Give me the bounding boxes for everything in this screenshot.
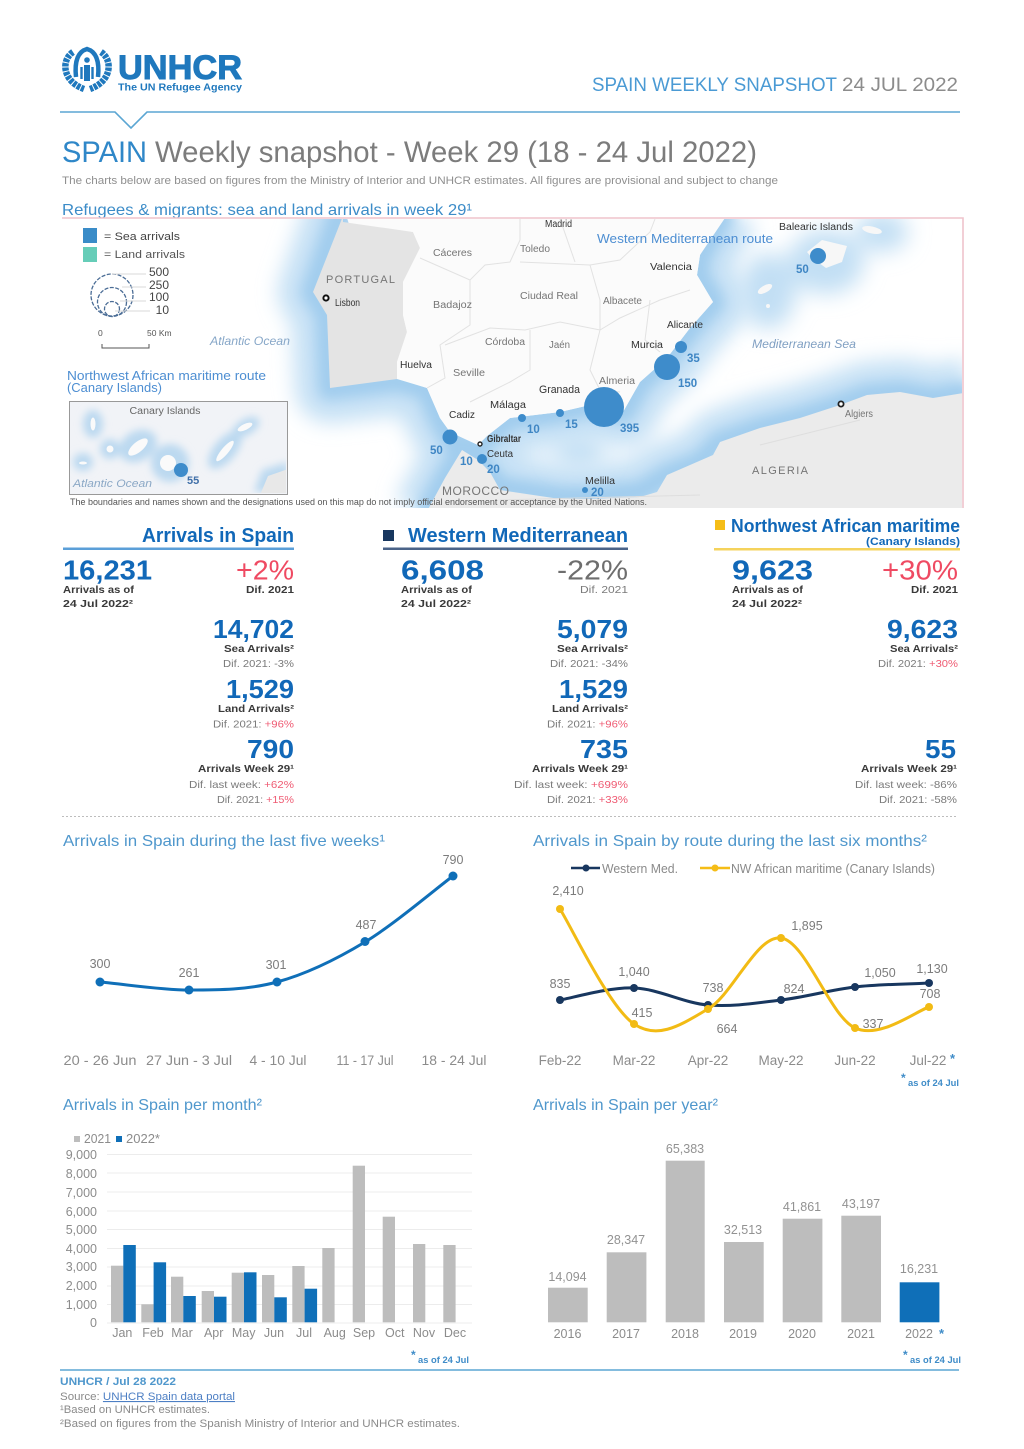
map labels: places: Cadiz [449,410,475,421]
panel: Western Mediterranean [383,525,629,806]
chart: arrivals per year: 43,197 [842,1197,880,1211]
map labels: routes and seas: Western Mediterranean route [597,231,773,246]
title: Weekly snapshot - Week 29 (18 - 24 Jul 2022) [155,136,757,169]
map labels: places: MOROCCO [442,484,509,498]
icon: UNHCR emblem [65,49,109,89]
map labels: routes and seas: Mediterranean Sea [752,337,856,351]
chart: arrivals per year: 2020 [788,1327,816,1341]
panel: Western Mediterranean: 24 Jul 2022² [401,598,472,610]
panel: Arrivals in Spain: Arrivals as of [63,584,135,596]
map labels: places: Gibraltar [487,434,521,445]
chart: arrivals per month: 1,000 [66,1298,97,1312]
map labels: places: PORTUGAL [326,274,395,286]
panel: Northwest African maritime: Arrivals as of [732,584,804,596]
chart: arrivals by route last six months: 835 [550,977,570,991]
heading: Arrivals in Spain per year² [533,1097,719,1114]
chart: arrivals per month: * [411,1348,416,1362]
chart: arrivals by route last six months: 738 [703,981,723,995]
chart: arrivals by route last six months: 1,040 [618,965,650,979]
legend: map [83,228,186,348]
panel: Northwest African maritime: Dif. 2021 [911,584,958,596]
legend: map: 10 [156,303,169,317]
footer: sources and notes: Source: UNHCR Spain data portal [60,1391,235,1403]
chart: arrivals per month: 8,000 [66,1167,97,1181]
chart: arrivals by route last six months: Jul-22 [910,1053,946,1068]
map disclaimer: The boundaries and names shown and the designations used on this map do not imply official endorsement or acceptance by the United Nations. [70,497,647,507]
panel: Arrivals in Spain: Arrivals Week 29¹ [198,763,295,775]
panel: Western Mediterranean: Sea Arrivals² [557,643,629,655]
panel: Western Mediterranean: 6,608 [401,554,484,586]
chart: arrivals by route last six months: 1,050 [864,966,896,980]
chart: arrivals by route last six months: 415 [632,1006,652,1020]
panel: Western Mediterranean: Arrivals Week 29¹ [532,763,629,775]
map labels: places: Granada [539,384,581,396]
chart: arrivals per month: 0 [90,1316,97,1330]
panel: Western Mediterranean: 735 [580,734,628,764]
panel: Arrivals in Spain: Dif. last week: +62% [189,779,294,791]
map labels: places: Melilla [585,476,615,487]
map labels: places: Málaga [490,400,526,411]
chart: arrivals per month: 3,000 [66,1260,97,1274]
chart: arrivals last five weeks: 18 - 24 Jul [422,1053,486,1068]
legend: 2021 [84,1132,111,1146]
map: arrival numbers: 35 [687,353,700,365]
map: arrival numbers: 20 [591,487,604,499]
map labels: places: Murcia [631,340,663,351]
panel: Arrivals in Spain [63,525,295,806]
panel: Northwest African maritime: 24 Jul 2022² [732,598,803,610]
chart: arrivals by route last six months: 1,130 [916,962,948,976]
inset: Canary Islands: Canary Islands [130,406,200,417]
legend: 2022* [126,1132,160,1146]
panel: Arrivals in Spain: Land Arrivals² [218,703,295,715]
chart: arrivals last five weeks: 11 - 17 Jul [336,1053,394,1068]
map: proportional arrival circles [442,248,826,493]
label: Northwest African route: (Canary Islands) [67,380,162,395]
panel: Arrivals in Spain: Dif. 2021: +96% [213,718,294,730]
chart: arrivals last five weeks: 301 [266,958,286,972]
chart: arrivals per month: Mar [171,1326,193,1340]
panel: Northwest African maritime: (Canary Islands) [866,536,960,548]
chart: arrivals last five weeks: 261 [179,966,199,980]
panel: Arrivals in Spain: Arrivals in Spain [142,525,294,547]
legend: map: 50 Km [147,328,172,338]
legend: map: = Sea arrivals [104,231,181,243]
panel: Western Mediterranean: Arrivals as of [401,584,473,596]
header label: SPAIN WEEKLY SNAPSHOT [592,75,837,96]
heading: Arrivals in Spain during the last five weeks¹ [63,833,385,850]
panel: Arrivals in Spain: Dif. 2021: +15% [217,794,294,806]
panel: Northwest African maritime: Dif. last week: -86% [855,779,957,791]
panel: Arrivals in Spain: 790 [247,734,294,764]
map labels: places: Alicante [667,320,703,331]
map labels: places: Valencia [650,262,692,273]
legend [74,1132,160,1146]
chart: arrivals per year: 2022 [905,1327,933,1341]
panel: Western Mediterranean: Dif. 2021: +33% [547,794,628,806]
legend: map: 0 [98,328,103,338]
map labels: places: Badajoz [433,300,472,311]
map: arrival numbers [430,264,809,499]
chart: arrivals per month: May [232,1326,256,1340]
footer: sources and notes: ¹Based on UNHCR estimates. [60,1404,210,1416]
chart: arrivals per year: 2017 [612,1327,640,1341]
heading: map section: Refugees & migrants: sea and land arrivals in week 29¹ [62,202,472,219]
panel: Northwest African maritime: Arrivals Week 29¹ [861,763,958,775]
heading: Arrivals in Spain per month² [63,1097,263,1114]
map: arrival numbers: 395 [620,423,640,435]
map: arrival numbers: 150 [678,378,697,390]
chart: arrivals per month: 6,000 [66,1205,97,1219]
legend: Western Med. [602,862,678,876]
chart: arrivals per month: Jan [112,1326,132,1340]
chart: arrivals by route last six months: Apr-22 [688,1053,728,1068]
chart: arrivals per month [63,1097,472,1365]
chart: arrivals per month: 2,000 [66,1279,97,1293]
chart: arrivals per year: 28,347 [607,1233,645,1247]
land: Portugal [313,216,420,388]
panel: Western Mediterranean: Dif. 2021: -34% [550,658,628,670]
chart: arrivals by route last six months: 824 [784,982,804,996]
map labels: places: Toledo [520,244,550,255]
chart: arrivals last five weeks: 20 - 26 Jun [64,1053,136,1068]
header label: 24 JUL 2022 [842,75,958,96]
panel: Arrivals in Spain: 1,529 [226,674,294,704]
header label [592,75,958,96]
panel: Northwest African maritime: Northwest African maritime [731,516,960,536]
chart: arrivals by route last six months: 1,895 [791,919,823,933]
panel: Arrivals in Spain: 24 Jul 2022² [63,598,134,610]
footer: sources and notes [60,1376,460,1430]
panel: Arrivals in Spain: +2% [236,554,294,586]
legend: map: 100 [149,290,169,304]
chart: arrivals per month: 4,000 [66,1242,97,1256]
panel: Northwest African maritime: Dif. 2021: -58% [879,794,957,806]
panel: Northwest African maritime: Sea Arrivals² [890,643,959,655]
panel: Western Mediterranean: Western Mediterranean [408,525,628,547]
logo: UNHCR: UNHCR [118,49,242,87]
chart: arrivals by route last six months: 337 [863,1017,883,1031]
panel: arrivals map [62,205,970,515]
inset: Canary Islands [70,402,288,495]
chart: arrivals last five weeks: 300 [90,957,110,971]
land: Africa [425,392,970,515]
chart: arrivals last five weeks: 487 [356,918,376,932]
panel: Arrivals in Spain: 14,702 [213,614,294,644]
subtitle: The charts below are based on figures from the Ministry of Interior and UNHCR estimates. All figures are provisional and subject to change [62,175,778,187]
inset: Canary Islands: 55 [187,475,199,487]
panel: Northwest African maritime: 55 [925,734,956,764]
chart: arrivals by route last six months [533,833,959,1088]
map labels: routes and seas [597,231,856,351]
legend: map: 500 [149,265,169,279]
chart: arrivals per month: Sep [353,1326,375,1340]
panel: Arrivals in Spain: Dif. 2021 [246,584,294,596]
title: SPAIN [62,136,147,169]
chart: arrivals per year: 2016 [554,1327,581,1341]
chart: arrivals per year: 16,231 [900,1262,938,1276]
chart: arrivals by route last six months: as of 24 Jul [908,1078,959,1088]
chart: arrivals last five weeks [63,833,486,1068]
chart: arrivals per year: * [939,1326,945,1341]
chart: arrivals by route last six months: Feb-22 [539,1053,581,1068]
map: arrival numbers: 20 [487,464,500,476]
logo: UNHCR: The UN Refugee Agency [118,82,242,94]
map labels: places: Cáceres [433,248,472,259]
legend: map: = Land arrivals [104,249,186,261]
panel: Western Mediterranean: Dif. 2021: +96% [547,718,628,730]
chart: arrivals per month: 7,000 [66,1186,97,1200]
map: arrival numbers: 15 [565,419,578,431]
chart: arrivals per year: 2019 [729,1327,757,1341]
chart: arrivals by route last six months: * [950,1051,956,1066]
chart: arrivals per year: as of 24 Jul [910,1355,961,1365]
map labels: places: Huelva [400,360,432,371]
map labels: places: ALGERIA [752,465,809,477]
legend: NW African maritime (Canary Islands) [731,862,935,876]
map labels: places: Balearic Islands [779,222,853,233]
chart: arrivals per month: Dec [444,1326,466,1340]
chart: arrivals by route last six months: 2,410 [552,884,584,898]
panel: Western Mediterranean: 1,529 [559,674,628,704]
chart: arrivals by route last six months: Jun-22 [834,1053,876,1068]
legend [571,862,935,876]
map: arrival numbers: 10 [527,424,540,436]
chart: arrivals per month: Aug [324,1326,346,1340]
map labels: places: Albacete [603,296,642,307]
label: Northwest African route: Northwest African maritime route [67,368,266,383]
land: Spain [343,205,725,445]
chart: arrivals by route last six months: 708 [920,987,940,1001]
panel: Western Mediterranean: Dif. 2021 [580,584,628,596]
chart: arrivals per year [533,1097,961,1365]
chart: arrivals last five weeks: 4 - 10 Jul [250,1053,306,1068]
chart: arrivals per year: 2021 [847,1327,875,1341]
map labels: places: Jaén [549,340,570,351]
map labels: places [323,219,873,498]
map base: sea, coast and land [269,219,962,508]
islands [756,224,883,308]
chart: arrivals per year: 14,094 [548,1270,587,1284]
chart: arrivals by route last six months: * [901,1071,906,1085]
map: arrival numbers: 50 [796,264,809,276]
province boundaries [420,219,690,402]
map labels: places: Madrid [545,219,572,230]
chart: arrivals by route last six months: Mar-22 [613,1053,655,1068]
chart: arrivals per year: * [903,1348,908,1362]
chart: arrivals per year: 32,513 [724,1223,762,1237]
chart: arrivals by route last six months: 664 [717,1022,737,1036]
panel: Western Mediterranean: 5,079 [557,614,628,644]
footer: sources and notes: ²Based on figures from the Spanish Ministry of Interior and UNHCR estimates. [60,1418,460,1430]
chart: arrivals per month: Apr [204,1326,223,1340]
panel: Northwest African maritime: 9,623 [887,614,958,644]
panel: Arrivals in Spain: 16,231 [63,554,152,586]
map labels: places: Córdoba [485,337,525,348]
panel: Western Mediterranean: Dif. last week: +699% [514,779,628,791]
panel: Western Mediterranean: Land Arrivals² [552,703,629,715]
label: Atlantic Ocean: Atlantic Ocean [209,334,290,348]
panel: Arrivals in Spain: Sea Arrivals² [224,643,295,655]
footer: sources and notes: UNHCR / Jul 28 2022 [60,1376,176,1388]
panel: Northwest African maritime: +30% [882,554,958,586]
map labels: places: Seville [453,368,485,379]
chart: arrivals per month: Jun [264,1326,284,1340]
map labels: places: Almeria [599,376,635,387]
map labels: places: Ciudad Real [520,291,578,302]
chart: arrivals per month: Jul [296,1326,312,1340]
panel: Northwest African maritime [714,516,960,806]
chart: arrivals last five weeks: 790 [443,853,463,867]
inset: Canary Islands: Atlantic Ocean [72,478,152,490]
label: Northwest African route [67,368,266,395]
panel: Northwest African maritime: 9,623 [732,554,813,586]
chart: arrivals per year: 65,383 [666,1142,704,1156]
chart: arrivals per month: as of 24 Jul [418,1355,469,1365]
chart: arrivals by route last six months: May-22 [758,1053,804,1068]
chart: arrivals per month: Feb [142,1326,164,1340]
map: arrival numbers: 10 [460,456,473,468]
panel: Northwest African maritime: Dif. 2021: +30% [878,658,958,670]
legend: map: 250 [149,278,169,292]
chart: arrivals last five weeks: 27 Jun - 3 Jul [146,1053,232,1068]
chart: arrivals per year: 41,861 [783,1200,821,1214]
map labels: places: Lisbon [335,298,360,309]
map labels: places: Ceuta [487,449,513,460]
chart: arrivals per month: Oct [385,1326,405,1340]
panel: Western Mediterranean: -22% [557,554,628,586]
panel: Arrivals in Spain: Dif. 2021: -3% [223,658,294,670]
map labels: places: Algiers [845,409,873,420]
heading: Arrivals in Spain by route during the last six months² [533,833,928,850]
chart: arrivals per month: Nov [413,1326,436,1340]
chart: arrivals per month: 9,000 [66,1148,97,1162]
chart: arrivals per year: 2018 [671,1327,699,1341]
map: arrival numbers: 50 [430,445,443,457]
chart: arrivals per month: 5,000 [66,1223,97,1237]
logo: UNHCR [65,49,242,94]
